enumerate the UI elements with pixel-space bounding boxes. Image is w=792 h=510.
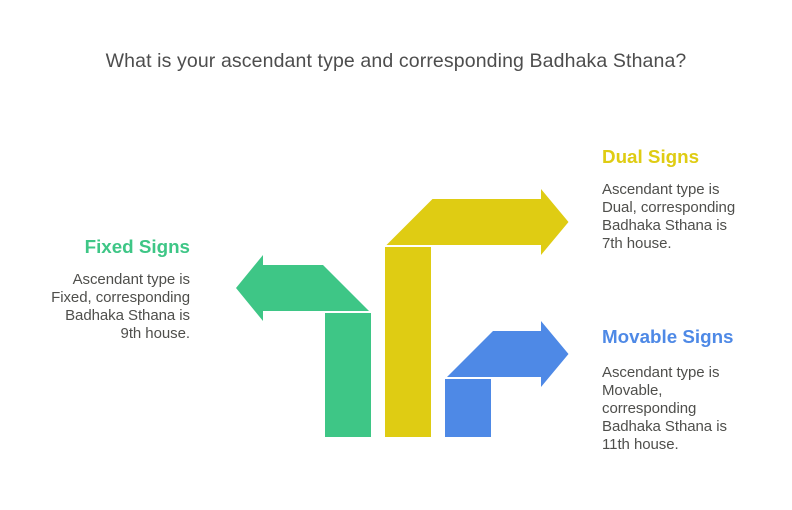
text: dual signs description [602, 181, 735, 252]
text: dual signs description: 7th house. [602, 235, 671, 252]
text: fixed signs description: Fixed, corresponding [51, 289, 190, 306]
heading: dual signs: Dual Signs [602, 146, 699, 167]
panel: fixed signs [51, 236, 190, 342]
text: dual signs description: Badhaka Sthana is [602, 217, 727, 234]
text: movable signs description: Movable, [602, 382, 662, 399]
text: fixed signs description: 9th house. [121, 325, 190, 342]
text: dual signs description: Ascendant type is [602, 181, 719, 198]
heading: fixed signs: Fixed Signs [85, 236, 190, 257]
text: movable signs description: Ascendant type is [602, 364, 719, 381]
panel: movable signs [602, 326, 734, 453]
heading: movable signs: Movable Signs [602, 326, 734, 347]
text: fixed signs description: Badhaka Sthana is [65, 307, 190, 324]
text: dual signs description: Dual, corresponding [602, 199, 735, 216]
text: movable signs description: Badhaka Sthana is [602, 418, 727, 435]
yellow arrow: dual signs [385, 189, 568, 437]
text: fixed signs description [51, 271, 190, 342]
text: movable signs description: corresponding [602, 400, 696, 417]
text: movable signs description [602, 364, 727, 453]
text: movable signs description: 11th house. [602, 436, 679, 453]
green arrow: fixed signs [236, 255, 371, 437]
blue arrow: movable signs [445, 321, 568, 437]
panel: dual signs [602, 146, 735, 252]
title: What is your ascendant type and corresponding Badhaka Sthana? [106, 50, 686, 72]
text: fixed signs description: Ascendant type is [73, 271, 190, 288]
